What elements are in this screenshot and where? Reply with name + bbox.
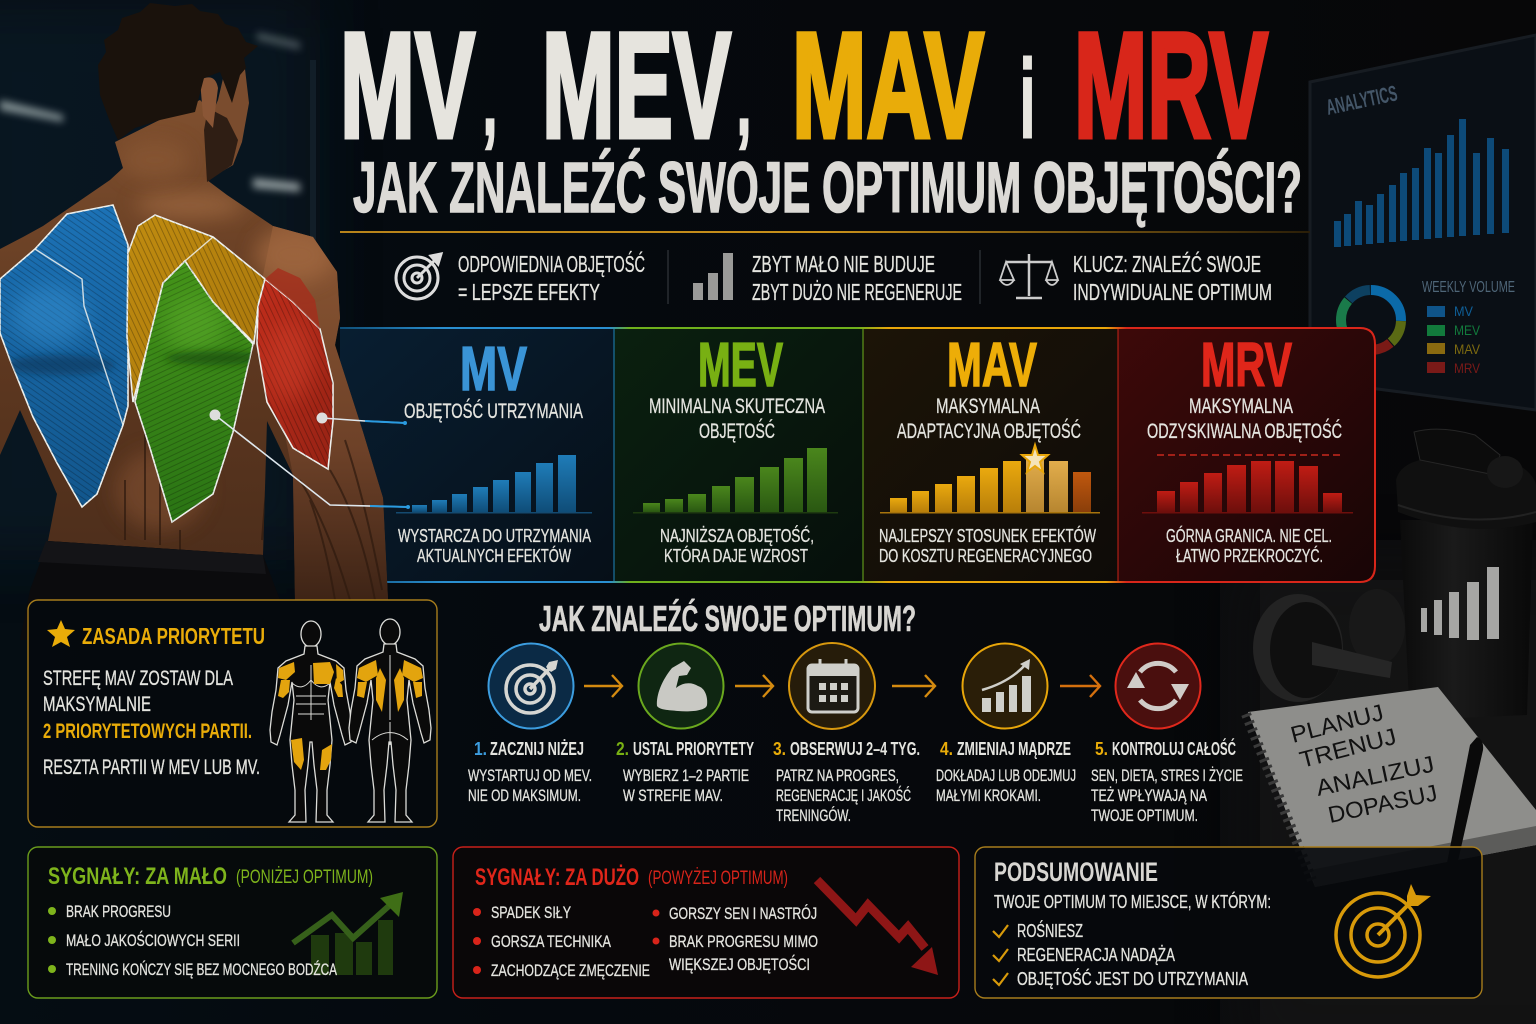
- face side: [205, 69, 249, 180]
- intro text 2: ZBYT MAŁO NIE BUDUJE: [752, 251, 935, 277]
- step 3 text: [776, 766, 911, 825]
- background man: [0, 3, 388, 640]
- figure: front body: [270, 621, 352, 822]
- beard: [204, 108, 238, 182]
- text: MRV note: [1166, 525, 1332, 566]
- text: MRV note: ŁATWO PRZEKROCZYĆ.: [1176, 545, 1323, 566]
- title: ,: [737, 49, 751, 155]
- intro row: [396, 250, 1272, 305]
- monitor: analytics screen: [1310, 35, 1536, 410]
- icon: growth chart circle: [962, 644, 1048, 728]
- step 2 title: 2.: [616, 739, 629, 759]
- description: MEV name: OBJĘTOŚĆ: [699, 419, 775, 443]
- list: too much signals left: SPADEK SIŁY: [491, 903, 571, 922]
- muscle fibres: [0, 205, 333, 522]
- icon: falling arrow: [817, 880, 938, 975]
- description: MAV name: MAKSYMALNA: [936, 395, 1040, 418]
- intro text 1: ODPOWIEDNIA OBJĘTOŚĆ: [458, 250, 645, 277]
- body skin: [0, 100, 388, 600]
- title: MEV: [542, 1, 731, 169]
- list: too much signals right: WIĘKSZEJ OBJĘTOŚCI: [669, 955, 810, 974]
- icon: star on MAV peak: [1022, 445, 1048, 472]
- chart: MEV bars: [633, 448, 838, 514]
- description: MEV name: [649, 395, 825, 443]
- intro text 3: INDYWIDUALNE OPTIMUM: [1073, 279, 1272, 305]
- card MRV: [1118, 329, 1375, 581]
- list: too little signals: TRENING KOŃCZY SIĘ BEZ MOCNEGO BODŹCA: [66, 960, 337, 979]
- intro text 3: [1073, 251, 1272, 305]
- text: priority rule: [43, 667, 260, 779]
- description: MV name: OBJĘTOŚĆ UTRZYMANIA: [404, 399, 583, 423]
- description: MAV name: ADAPTACYJNA OBJĘTOŚĆ: [897, 419, 1081, 443]
- text: MV note: [398, 526, 591, 566]
- step 4 text: MAŁYMI KROKAMI.: [936, 786, 1041, 805]
- icon: calendar circle: [789, 643, 875, 729]
- intro text 2: [752, 251, 962, 305]
- step 1 text: [468, 766, 592, 805]
- monitor bar chart: [1334, 119, 1509, 247]
- card MEV: [614, 329, 863, 581]
- chart: MV bars: [396, 455, 592, 514]
- step 2 text: [623, 766, 749, 805]
- card content: MEV: [633, 331, 838, 566]
- step 1: [468, 644, 592, 805]
- step 3 text: REGENERACJĘ I JAKOŚĆ: [776, 786, 911, 805]
- text: priority rule: RESZTA PARTII W MEV LUB MV.: [43, 756, 260, 779]
- card content: MRV: [1142, 331, 1353, 566]
- step 5 text: TEŻ WPŁYWAJĄ NA: [1091, 786, 1207, 805]
- connector: triceps to MV: [322, 418, 405, 423]
- step 2 text: W STREFIE MAV.: [623, 786, 723, 805]
- panel: priority rule: [28, 600, 437, 827]
- muscle: yellow rear shoulder: [127, 215, 265, 402]
- heading: too much: (POWYŻEJ OPTIMUM): [648, 868, 788, 889]
- icon: gold target: [1336, 884, 1431, 977]
- text: MEV note: NAJNIŻSZA OBJĘTOŚĆ,: [660, 525, 814, 546]
- icon: rising arrow chart: [293, 892, 403, 975]
- arrow 2: [735, 675, 773, 697]
- muscle: green back: [135, 261, 253, 522]
- gold muscles: back: [357, 660, 423, 712]
- monitor legend: MRV: [1454, 360, 1481, 376]
- monitor title: ANALYTICS: [1324, 80, 1399, 120]
- step 5 title: [1095, 738, 1236, 759]
- list: too little signals: BRAK PROGRESU: [66, 902, 171, 921]
- pen: [1446, 737, 1483, 870]
- heading: MAV: MAV: [947, 331, 1037, 400]
- step 2 title: [616, 739, 754, 759]
- list: too much signals right: [652, 904, 818, 974]
- icon: scales: [1000, 254, 1058, 298]
- connector lines: [210, 410, 410, 509]
- text: MRV note: GÓRNA GRANICA. NIE CEL.: [1166, 525, 1332, 546]
- list: too much signals right: GORSZY SEN I NASTRÓJ: [669, 904, 817, 923]
- description: MEV name: MINIMALNA SKUTECZNA: [649, 395, 825, 418]
- heading: too much: SYGNAŁY: ZA DUŻO: [475, 864, 639, 891]
- text: MAV note: [879, 525, 1096, 566]
- arrow 3: [892, 675, 935, 697]
- text: MV note: WYSTARCZA DO UTRZYMANIA: [398, 526, 591, 546]
- heading: too little: SYGNAŁY: ZA MAŁO: [48, 863, 227, 890]
- gold muscles: front: [278, 662, 344, 770]
- skin highlights: [115, 140, 382, 600]
- card content: MV: [396, 335, 592, 566]
- list: summary checks: OBJĘTOŚĆ JEST DO UTRZYMANIA: [1017, 968, 1248, 989]
- handwritten word: dopasuj: DOPASUJ: [1326, 779, 1440, 828]
- notebook: [1246, 687, 1536, 887]
- list: too much signals left: ZACHODZĄCE ZMĘCZENIE: [491, 961, 650, 980]
- heading: priority rule: ZASADA PRIORYTETU: [82, 623, 265, 649]
- step 4 text: DOKŁADAJ LUB ODEJMUJ: [936, 766, 1076, 785]
- intro text 1: [458, 250, 645, 305]
- panel: summary: [975, 847, 1482, 998]
- step 2 title: USTAL PRIORYTETY: [633, 739, 754, 759]
- title: MRV: [1074, 1, 1268, 169]
- step 4 title: 4.: [940, 739, 953, 759]
- arrow 4: [1060, 675, 1100, 697]
- step 5: [1091, 644, 1243, 825]
- card content: MAV: [879, 331, 1100, 566]
- panel: too little signals: [28, 847, 437, 998]
- step 3 title: OBSERWUJ 2–4 TYG.: [790, 739, 920, 759]
- chart: MRV bars: [1142, 461, 1353, 514]
- text: priority rule: 2 PRIORYTETOWYCH PARTII.: [43, 720, 252, 743]
- step 5 text: TWOJE OPTIMUM.: [1091, 806, 1198, 825]
- title: MAV: [792, 1, 984, 169]
- text: MEV note: [660, 525, 814, 566]
- step 3: [773, 643, 920, 825]
- shaker bottle: [1396, 429, 1536, 720]
- text: MAV note: DO KOSZTU REGENERACYJNEGO: [879, 546, 1092, 566]
- monitor donut: [1329, 278, 1413, 362]
- step 1 title: 1.: [474, 739, 487, 759]
- text: MEV note: KTÓRA DAJE WZROST: [664, 545, 808, 566]
- step 3 title: 3.: [773, 739, 786, 759]
- monitor legend: MV: [1454, 303, 1474, 319]
- heading: how to find optimum: JAK ZNALEŹĆ SWOJE OPTIMUM?: [539, 597, 916, 639]
- description: MRV name: ODZYSKIWALNA OBJĘTOŚĆ: [1147, 419, 1342, 443]
- handwritten word: planuj: PLANUJ: [1288, 699, 1386, 748]
- title: i: [1020, 38, 1035, 161]
- title: [340, 1, 1268, 169]
- text: MAV note: NAJLEPSZY STOSUNEK EFEKTÓW: [879, 525, 1096, 546]
- list: too much signals right: BRAK PROGRESU MIMO: [669, 932, 818, 951]
- muscle: blue lats and traps: [0, 205, 333, 522]
- step 3 title: [773, 739, 920, 759]
- step 3 text: PATRZ NA PROGRES,: [776, 766, 899, 785]
- panel: definition cards: [340, 328, 1375, 582]
- list: summary checks: REGENERACJA NADĄŻA: [1017, 945, 1175, 965]
- card MAV: [863, 329, 1118, 581]
- figure: back body: [349, 619, 431, 822]
- list: summary checks: ROŚNIESZ: [1017, 920, 1083, 941]
- icon: biceps circle: [638, 644, 724, 728]
- step 5 title: KONTROLUJ CAŁOŚĆ: [1112, 738, 1236, 759]
- shorts: [20, 541, 295, 640]
- step 1 text: NIE OD MAKSIMUM.: [468, 786, 581, 805]
- intro text 2: ZBYT DUŻO NIE REGENERUJE: [752, 279, 962, 305]
- step 4: [936, 644, 1076, 805]
- step 3 text: TRENINGÓW.: [776, 806, 851, 825]
- dumbbell: [1253, 589, 1405, 702]
- muscle shading: [5, 285, 314, 400]
- step 4 title: ZMIENIAJ MĄDRZE: [957, 739, 1071, 759]
- icon: target: [396, 254, 441, 299]
- icon: star: [47, 620, 75, 647]
- shaker logo bars: [1421, 567, 1499, 640]
- heading: summary: PODSUMOWANIE: [994, 857, 1158, 887]
- icon: bars: [693, 253, 733, 300]
- step 4 text: [936, 766, 1076, 805]
- list: too much signals left: [473, 903, 650, 980]
- step 5 title: 5.: [1095, 739, 1108, 759]
- intro text 3: KLUCZ: ZNALEŹĆ SWOJE: [1073, 251, 1261, 277]
- muscle: red triceps: [257, 279, 333, 469]
- handwritten word: analizuj: ANALIZUJ: [1314, 751, 1436, 801]
- description: MAV name: [897, 395, 1081, 443]
- step 1 text: WYSTARTUJ OD MEV.: [468, 766, 592, 785]
- step 1 title: ZACZNIJ NIŻEJ: [490, 739, 584, 759]
- text: MV note: AKTUALNYCH EFEKTÓW: [417, 545, 571, 566]
- icon: refresh circle: [1116, 644, 1200, 728]
- panel: too much signals: [453, 847, 959, 998]
- monitor legend: [1422, 279, 1515, 376]
- chart: MAV bars: [880, 458, 1100, 514]
- list: too little signals: [48, 902, 337, 979]
- title: MV: [340, 1, 475, 169]
- step 5 text: SEN, DIETA, STRES I ŻYCIE: [1091, 766, 1243, 785]
- step 4 title: [940, 739, 1071, 759]
- title: ,: [483, 49, 497, 155]
- card MV: [340, 329, 614, 581]
- connector: back to MV bars: [215, 415, 408, 507]
- intro text 1: = LEPSZE EFEKTY: [458, 279, 600, 305]
- monitor legend: MEV: [1454, 322, 1481, 338]
- list: too much signals left: GORSZA TECHNIKA: [491, 932, 611, 951]
- list: too little signals: MAŁO JAKOŚCIOWYCH SERII: [66, 931, 240, 950]
- icon: target circle: [488, 644, 574, 728]
- ear: [200, 77, 218, 128]
- arrow 1: [584, 675, 622, 697]
- monitor legend: MAV: [1454, 341, 1481, 357]
- heading: MEV: MEV: [698, 331, 783, 400]
- step 2: [616, 644, 754, 805]
- handwritten word: trenuj: TRENUJ: [1297, 723, 1399, 773]
- list: summary checks: [993, 920, 1248, 989]
- heading: MRV: MRV: [1201, 331, 1292, 400]
- heading: MV: MV: [460, 335, 527, 404]
- text: priority rule: STREFĘ MAV ZOSTAW DLA: [43, 667, 233, 690]
- step 5 text: [1091, 766, 1243, 825]
- text: priority rule: MAKSYMALNIE: [43, 693, 151, 716]
- text: summary lead: TWOJE OPTIMUM TO MIEJSCE, W KTÓRYM:: [994, 891, 1271, 912]
- description: MRV name: [1147, 395, 1342, 443]
- step 2 text: WYBIERZ 1–2 PARTIE: [623, 766, 749, 785]
- description: MRV name: MAKSYMALNA: [1189, 395, 1293, 418]
- hair: [98, 3, 258, 140]
- step 1 title: [474, 739, 584, 759]
- heading: too little: (PONIŻEJ OPTIMUM): [236, 867, 373, 888]
